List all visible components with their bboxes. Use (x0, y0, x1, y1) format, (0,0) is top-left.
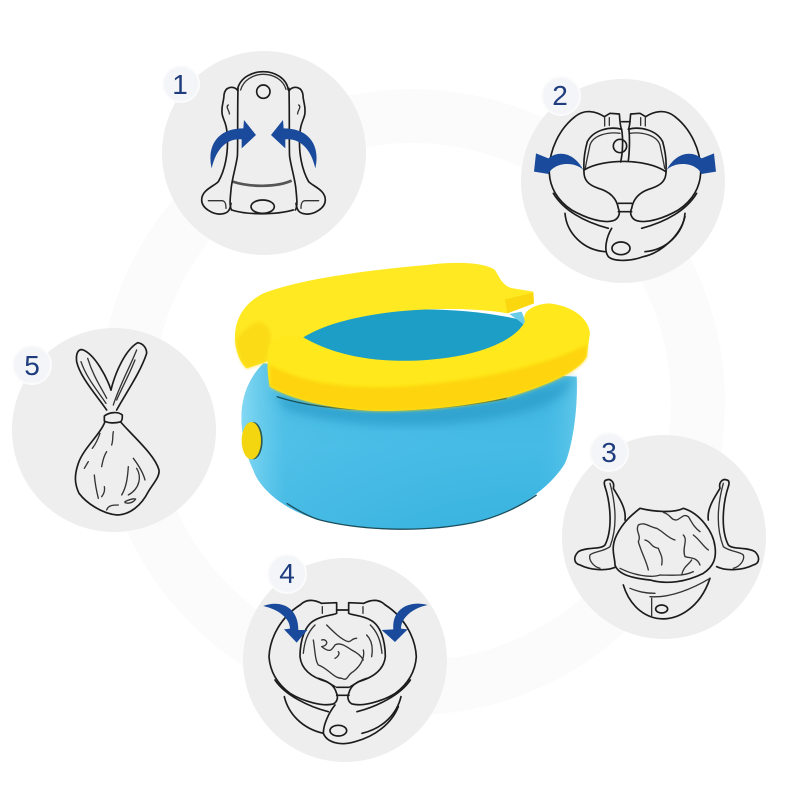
icon: opening the potty seat with outward arrows (534, 112, 716, 260)
badge: step 1 number (163, 66, 199, 102)
panel: step 4 (243, 555, 447, 762)
panel: step 1 (162, 51, 366, 255)
badge: step 3 number (590, 433, 628, 471)
arrow: left inward (263, 604, 307, 643)
badge: step 2 number (542, 77, 580, 115)
potty body (241, 363, 577, 529)
badge: step 3 number: 3 (601, 437, 617, 468)
icon: liner bag placed in opened potty (575, 480, 759, 619)
side button (242, 422, 263, 459)
arrow: right inward (382, 604, 428, 642)
icon: folded potty with inward arrows (202, 72, 325, 214)
background ring (126, 116, 698, 688)
panel: step 5 (12, 328, 216, 532)
back half of seat (235, 263, 534, 368)
badge: step 2 number: 2 (552, 80, 568, 111)
badge: step 5 number (13, 346, 51, 384)
main image: blue and yellow potty (235, 263, 590, 529)
badge: step 4 number (268, 555, 306, 593)
icon: closing the seat over the bag with inward arrows (263, 600, 428, 744)
badge: step 4 number: 4 (279, 558, 295, 589)
inner bowl (300, 309, 528, 362)
badge: step 1 number: 1 (172, 69, 188, 100)
panel: step 2 (521, 77, 725, 283)
icon: tied liner bag (75, 343, 159, 515)
panel: step 3 (562, 433, 766, 639)
front half of seat (268, 303, 590, 411)
badge: step 5 number: 5 (24, 350, 40, 381)
